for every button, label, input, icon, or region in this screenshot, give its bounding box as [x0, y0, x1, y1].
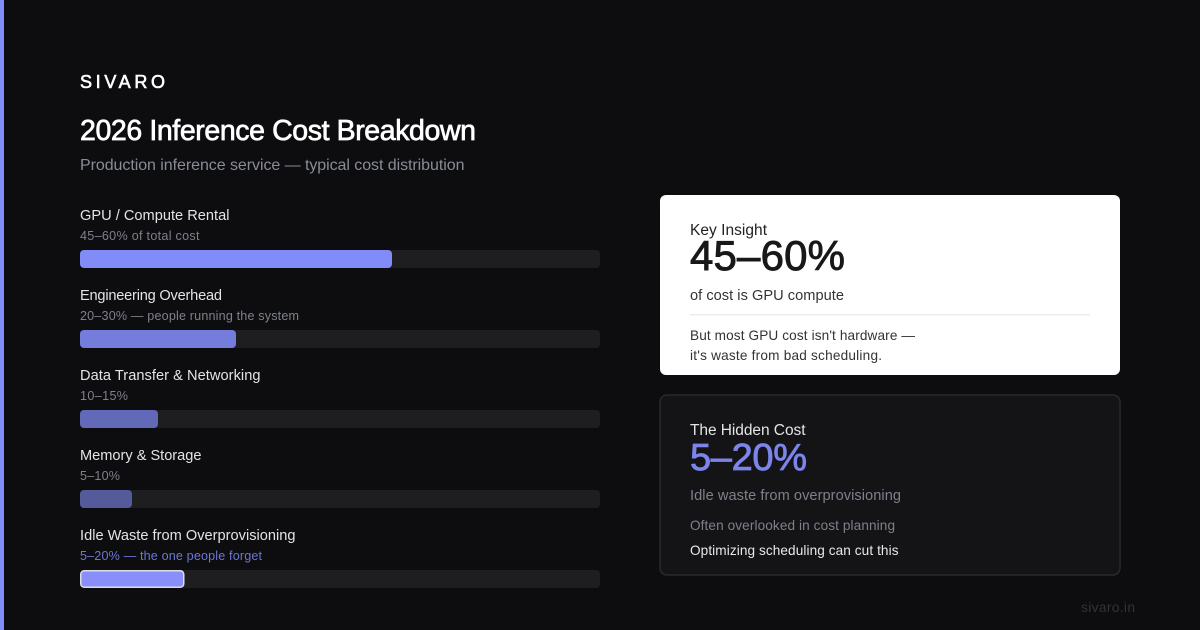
row: Engineering Overhead: Engineering Overhead: [80, 288, 222, 304]
brand wordmark: SIVARO: [80, 72, 165, 92]
card: key insight: [660, 195, 1120, 375]
row: Idle Waste from Overprovisioning: 5–20% — the one people forget: [80, 549, 262, 563]
insight note: But most GPU cost isn't hardware —: [690, 328, 915, 343]
row: Engineering Overhead: [80, 288, 600, 348]
card: the hidden cost: [660, 395, 1120, 575]
insight note: [690, 328, 915, 363]
row: Idle Waste from Overprovisioning: Idle Waste from Overprovisioning: [80, 528, 296, 544]
stat caption: of cost is GPU compute: [690, 288, 844, 304]
row: Memory & Storage: Memory & Storage: [80, 448, 202, 464]
row: Data Transfer & Networking: [80, 368, 600, 428]
row: GPU / Compute Rental: GPU / Compute Rental: [80, 208, 230, 224]
subtitle: Production inference service — typical cost distribution: [80, 157, 464, 174]
row: Engineering Overhead: 20–30% — people running the system: [80, 309, 299, 323]
row: GPU / Compute Rental: 45–60% of total cost: [80, 229, 200, 243]
row: Memory & Storage: [80, 448, 600, 508]
panel: cost breakdown bars: [80, 208, 600, 588]
footer url: sivaro.in: [1081, 600, 1135, 615]
row: GPU / Compute Rental: [80, 208, 600, 268]
card heading: The Hidden Cost: [690, 422, 806, 439]
big number: 45–60%: [690, 232, 845, 279]
row: Memory & Storage: 5–10%: [80, 469, 120, 483]
note: overlooked: Often overlooked in cost planning: [690, 518, 895, 533]
stat caption: Idle waste from overprovisioning: [690, 488, 901, 504]
big number: 5–20%: [690, 437, 807, 479]
row: Data Transfer & Networking: Data Transfer & Networking: [80, 368, 260, 384]
note: optimizing: Optimizing scheduling can cut this: [690, 543, 899, 558]
row: Idle Waste from Overprovisioning: [80, 528, 600, 588]
title: 2026 Inference Cost Breakdown: [80, 115, 476, 147]
row: Data Transfer & Networking: 10–15%: [80, 389, 128, 403]
insight note: it's waste from bad scheduling.: [690, 348, 882, 363]
card heading: Key Insight: [690, 222, 768, 239]
